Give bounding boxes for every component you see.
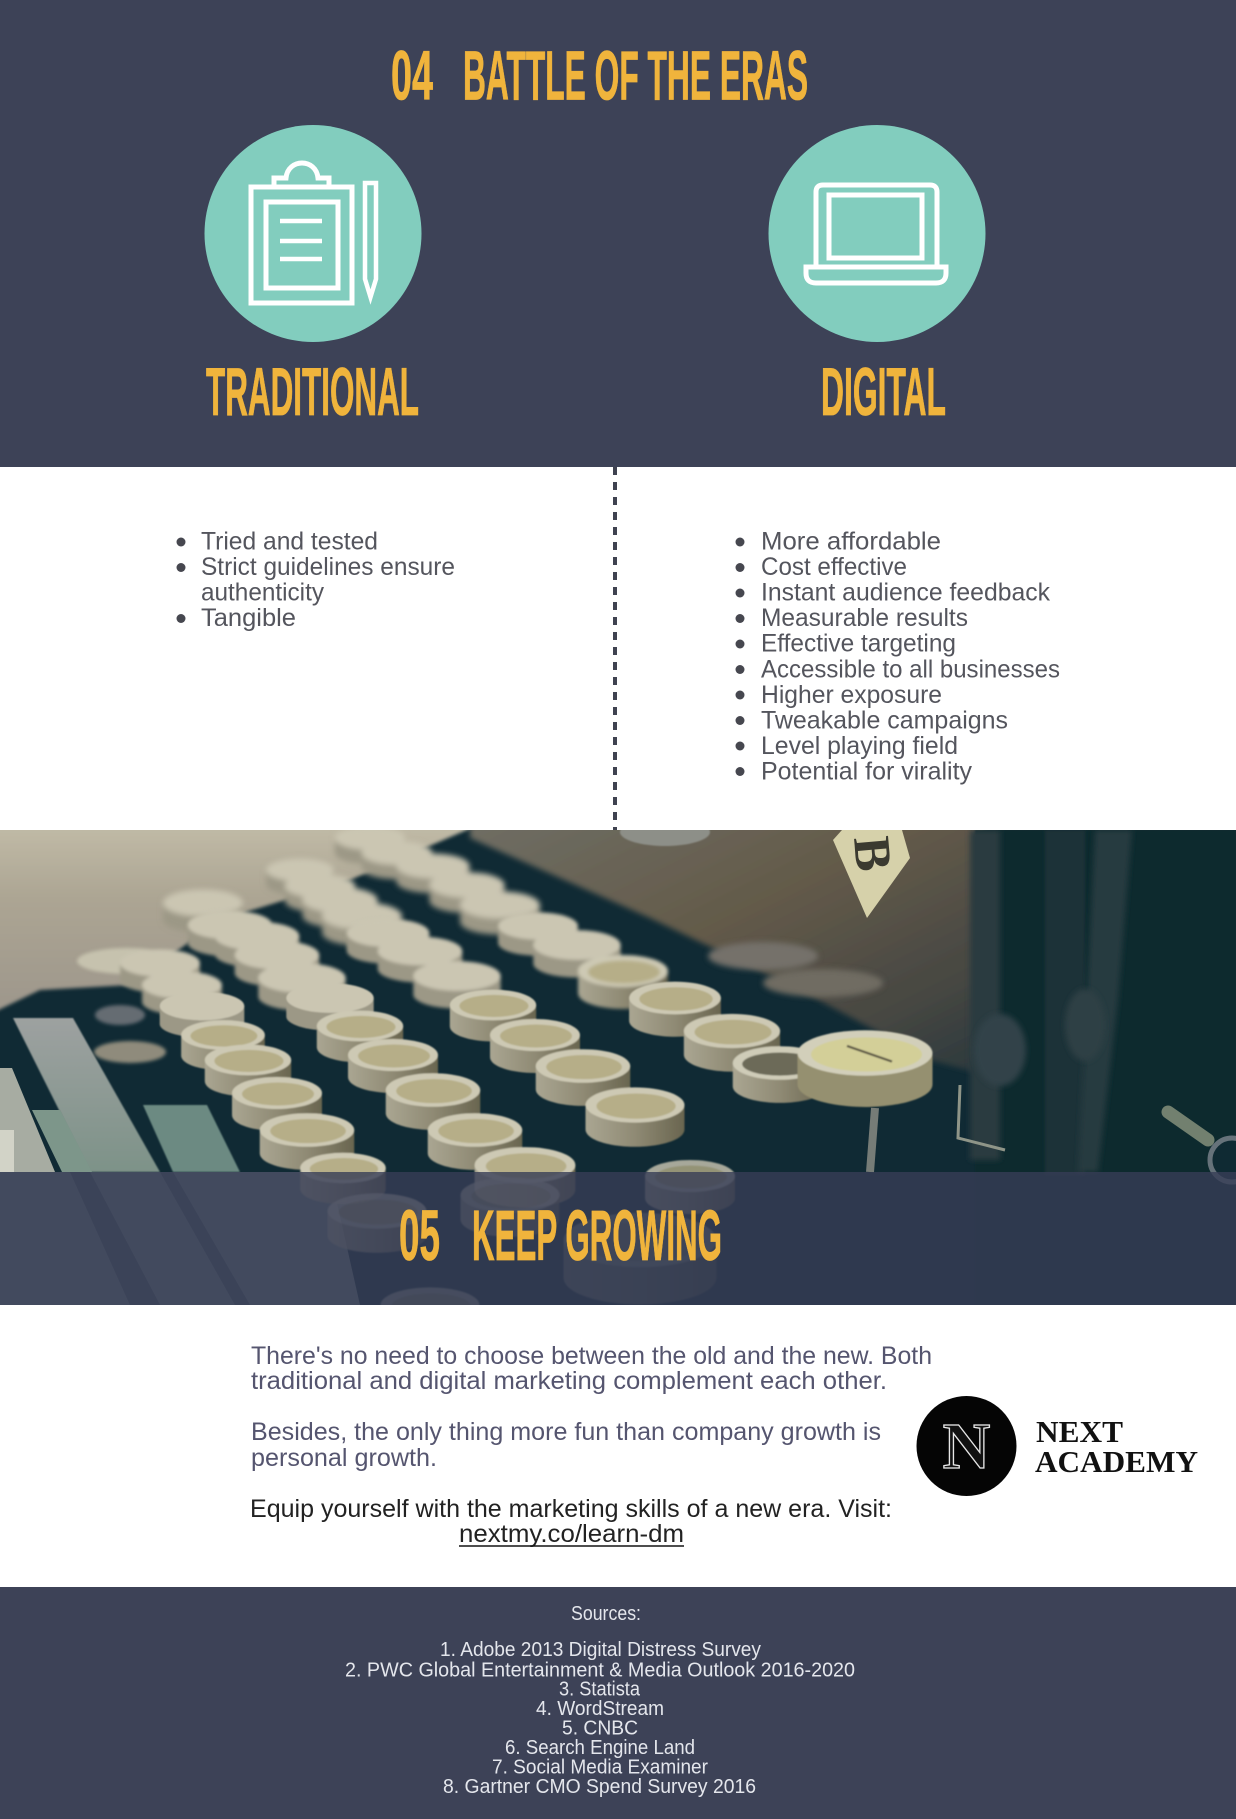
panel: battle of the eras header: BATTLE OF THE ERAS <box>463 36 808 114</box>
list: digital benefits: Accessible to all businesses <box>761 655 1060 683</box>
sources list: 1. Adobe 2013 Digital Distress Survey <box>440 1639 761 1661</box>
list: digital benefits: Higher exposure <box>761 681 942 709</box>
icon: clipboard and pencil in circle <box>204 125 422 342</box>
panel: battle of the eras header <box>0 0 1236 467</box>
panel: battle of the eras header: TRADITIONAL <box>206 354 419 430</box>
sources list <box>345 1639 855 1798</box>
title: 05 keep growing <box>399 1197 722 1276</box>
list: traditional benefits: Tried and tested <box>201 527 378 555</box>
sources heading: Sources: <box>571 1603 641 1625</box>
list: traditional benefits <box>176 527 455 632</box>
call to action with link: nextmy.co/learn-dm <box>459 1520 684 1548</box>
list: traditional benefits: Strict guidelines ensure <box>201 553 455 581</box>
title: 04 battle of the eras <box>391 36 808 114</box>
text: personal growth <box>251 1418 881 1472</box>
title: 04 battle of the eras: 04 <box>391 36 433 114</box>
photo: vintage typewriter keys: B <box>842 834 902 874</box>
photo: vintage typewriter keys <box>0 818 1236 1347</box>
sources list: 2. PWC Global Entertainment & Media Outlook 2016-2020 <box>345 1660 855 1682</box>
list: digital benefits: Level playing field <box>761 732 958 760</box>
list: digital benefits: Measurable results <box>761 604 968 632</box>
text: old and new: traditional and digital marketing complement each other. <box>251 1367 887 1395</box>
text: personal growth: personal growth. <box>251 1444 437 1472</box>
panel: battle of the eras header: DIGITAL <box>821 354 946 430</box>
logo: next academy: ACADEMY <box>1035 1444 1198 1479</box>
sources list: 7. Social Media Examiner <box>492 1756 708 1778</box>
sources list: 4. WordStream <box>536 1698 664 1720</box>
call to action with link: Equip yourself with the marketing skills of a new era. Visit: <box>250 1495 892 1523</box>
panel: comparison lists <box>0 467 1236 830</box>
list: digital benefits: Cost effective <box>761 553 907 581</box>
sources list: 8. Gartner CMO Spend Survey 2016 <box>443 1776 756 1798</box>
title: 05 keep growing: 05 <box>399 1197 440 1276</box>
text: personal growth: Besides, the only thing more fun than company growth is <box>251 1418 881 1446</box>
banner: keep growing overlay <box>0 1172 1236 1305</box>
list: digital benefits: Potential for virality <box>761 758 972 786</box>
sources list: 5. CNBC <box>562 1718 638 1740</box>
logo: next academy <box>916 1396 1198 1496</box>
list: digital benefits: Tweakable campaigns <box>761 706 1008 734</box>
logo: next academy: NEXT <box>1036 1414 1123 1449</box>
panel: conclusion <box>0 1305 1236 1587</box>
text: old and new <box>251 1342 932 1395</box>
list: traditional benefits: Tangible <box>201 604 296 632</box>
list: traditional benefits: authenticity <box>201 578 324 606</box>
list: digital benefits: More affordable <box>761 527 941 555</box>
list: digital benefits <box>736 527 1060 786</box>
list: digital benefits: Instant audience feedback <box>761 578 1050 606</box>
sources list: 6. Search Engine Land <box>505 1737 695 1759</box>
logo: next academy: N <box>943 1410 990 1483</box>
sources list: 3. Statista <box>559 1678 641 1700</box>
list: digital benefits: Effective targeting <box>761 630 956 658</box>
banner: keep growing overlay: KEEP GROWING <box>472 1197 722 1276</box>
icon: laptop in circle <box>768 125 986 342</box>
call to action with link <box>250 1495 892 1548</box>
text: old and new: There's no need to choose between the old and the new. Both <box>251 1342 932 1370</box>
panel: sources footer <box>0 1587 1236 1819</box>
